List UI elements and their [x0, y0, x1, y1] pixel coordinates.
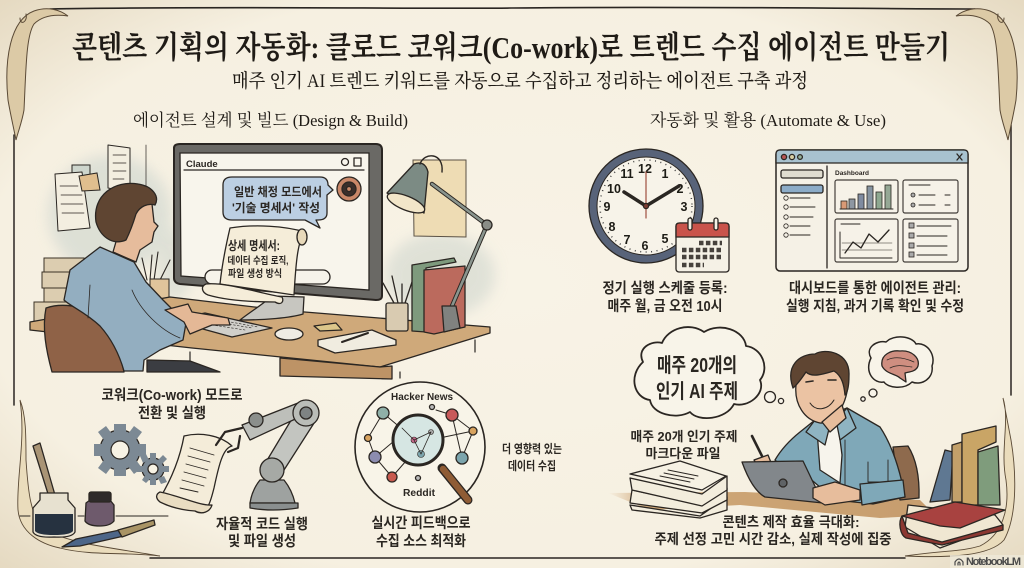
chat bubble: '기술 명세서' 작성	[232, 200, 320, 215]
caption: switch to co-work mode: 코워크(Co-work) 모드로	[102, 387, 242, 404]
pencil cup	[142, 252, 170, 280]
pen	[752, 436, 764, 460]
icon: ink bottles and pen	[20, 443, 168, 547]
shirt	[64, 247, 186, 371]
icon: clock: 9	[604, 200, 611, 214]
icon: magnifier over source network: Reddit	[403, 487, 435, 499]
icon: calendar	[676, 218, 729, 272]
thought cloud: weekly topics: 인기 AI 주제	[656, 380, 738, 403]
thought cloud: brain	[861, 337, 933, 401]
caption: autonomous code run: 및 파일 생성	[228, 533, 296, 550]
yellow poster	[413, 160, 466, 237]
spec scroll: 파일 생성 방식	[228, 267, 282, 280]
hand	[813, 482, 860, 505]
icon: robot arm holding scroll	[157, 400, 319, 513]
monitor	[174, 144, 382, 300]
wall papers	[55, 145, 146, 231]
caption: schedule	[602, 280, 728, 315]
icon: clock: 2	[677, 182, 684, 196]
input bar	[205, 270, 330, 284]
icon: clock: 5	[662, 232, 669, 246]
caption: markdown files: 매주 20개 인기 주제	[630, 429, 738, 444]
caption: data collection	[502, 441, 562, 473]
icon: clock: 7	[624, 233, 631, 247]
shirt	[775, 408, 905, 504]
subtitle: 매주 인기 AI 트렌드 키워드를 자동으로 수집하고 정리하는 에이전트 구축 과정	[232, 69, 808, 92]
caption: schedule: 매주 월, 금 오전 10시	[608, 298, 722, 315]
white tee	[817, 424, 842, 483]
icon: clock: 12	[638, 162, 652, 176]
caption: content productivity: 콘텐츠 제작 효율 극대화:	[722, 514, 860, 530]
caption: markdown files	[630, 429, 738, 461]
heading: automate and use: 자동화 및 활용 (Automate & Use)	[650, 110, 886, 130]
caption: markdown files: 마크다운 파일	[646, 446, 720, 461]
caption: switch to co-work mode: 전환 및 실행	[138, 405, 206, 422]
caption: autonomous code run: 자율적 코드 실행	[216, 516, 308, 533]
icon: stack of papers	[630, 461, 727, 518]
spec scroll	[202, 226, 307, 303]
icon: magnifier over source network	[355, 382, 485, 512]
hair	[791, 352, 849, 395]
caption: schedule: 정기 실행 스케줄 등록:	[602, 280, 728, 297]
illustration: smiling man with tablet	[742, 352, 919, 505]
icon: clock: 8	[609, 220, 616, 234]
icon: dashboard window: Dashboard	[835, 170, 869, 177]
desk band	[608, 492, 935, 518]
chair	[893, 446, 919, 500]
desk cup with pencils	[383, 276, 412, 303]
hands	[165, 304, 230, 334]
caption: data collection: 더 영향력 있는	[502, 441, 562, 456]
chat bubble	[223, 177, 333, 228]
caption: content productivity: 주제 선정 고민 시간 감소, 실제 작성에 집중	[654, 531, 892, 547]
spec scroll: 상세 명세서:	[228, 239, 280, 253]
icon: clock	[589, 149, 703, 263]
icon: magnifier over source network: Hacker News	[391, 391, 453, 403]
hair	[96, 183, 156, 242]
caption: dashboard: 실행 지침, 과거 기록 확인 및 수정	[786, 298, 964, 315]
wall wash	[48, 155, 495, 317]
notebooklm logo: NotebookLM	[966, 556, 1021, 568]
face	[796, 362, 848, 423]
caption: content productivity	[654, 514, 892, 547]
icon: clock: 1	[662, 167, 669, 181]
caption: dashboard	[786, 280, 964, 315]
caption: source optimisation: 실시간 피드백으로	[372, 515, 470, 532]
thought cloud: weekly topics	[634, 327, 784, 418]
icon: books stack	[900, 426, 1005, 548]
desk books	[412, 258, 456, 332]
icon: clock: 3	[681, 200, 688, 214]
tablet	[742, 461, 823, 503]
spec scroll: 데이터 수집 로직,	[228, 254, 289, 267]
lamp	[432, 184, 487, 306]
claude label: Claude	[186, 159, 218, 170]
thought cloud: weekly topics: 매주 20개의	[657, 354, 737, 377]
notebook	[318, 330, 396, 353]
heading: design and build: 에이전트 설계 및 빌드 (Design & Build)	[133, 110, 408, 130]
collar	[806, 408, 856, 445]
icon: clock: 6	[642, 239, 649, 253]
caption: autonomous code run	[216, 516, 308, 550]
illustration: man working at desk with monitor	[30, 144, 495, 379]
desk	[30, 297, 490, 367]
caption: dashboard: 대시보드를 통한 에이전트 관리:	[789, 280, 961, 297]
icon: clock: 10	[607, 182, 621, 196]
left books	[34, 258, 84, 322]
notebooklm logo	[950, 555, 1024, 568]
caption: source optimisation: 수집 소스 최적화	[376, 533, 466, 550]
icon: gears	[94, 424, 169, 485]
caption: data collection: 데이터 수집	[508, 459, 556, 473]
chat bubble: 일반 채정 모드에서	[234, 185, 322, 199]
caption: source optimisation	[372, 515, 470, 550]
icon: clock: 11	[620, 167, 634, 181]
chair	[44, 305, 124, 372]
neck and face	[113, 204, 158, 262]
claude avatar	[337, 177, 361, 201]
caption: switch to co-work mode	[102, 387, 242, 422]
keyboard and mouse	[170, 313, 272, 337]
icon: dashboard window	[776, 150, 968, 271]
